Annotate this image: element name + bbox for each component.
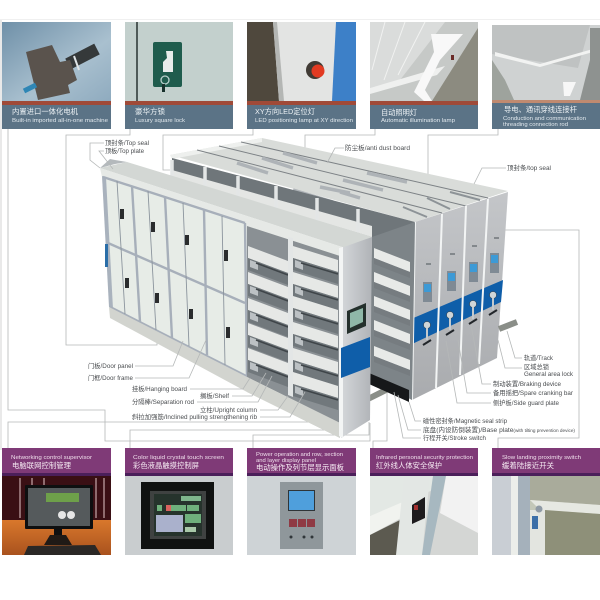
label: separation rod: 分隔棒/Separation rod: [132, 397, 194, 406]
control screens: [423, 238, 499, 302]
label: door frame: 门框/Door frame: [88, 373, 133, 382]
label: upright column: [200, 396, 288, 414]
panel: XY direction LED lamp: [247, 22, 356, 129]
label: track: 轨道/Track: [524, 353, 554, 362]
panel: slow landing proximity switch: Slow landing proximity switch: [502, 455, 581, 461]
panel: conduction threading rod: Conduction and communication: [503, 116, 586, 122]
label: top seal left: [90, 138, 150, 168]
label: general area lock: General area lock: [524, 371, 574, 378]
connector lines between photos and shelving: [8, 129, 579, 448]
label: door frame: [88, 340, 206, 382]
panel: networking control supervisor: 电脑联网控制管理: [12, 460, 71, 470]
label: hanging board: [132, 378, 250, 393]
label: anti dust board: [327, 143, 410, 163]
label: stroke switch: 行程开关/Stroke switch: [423, 433, 486, 442]
panel: automatic illumination lamp: [370, 22, 478, 129]
top rods: [237, 153, 480, 217]
panel: networking control supervisor: [2, 448, 111, 555]
label: base plate: [398, 395, 575, 434]
label: upright column: 立柱/Upright column: [200, 405, 257, 414]
label: shelf: 搁板/Shelf: [200, 391, 229, 400]
panel: conduction threading rod: 导电、通讯穿线连接杆: [504, 104, 577, 114]
front carriage top plate: [100, 162, 372, 248]
plinth: [109, 307, 340, 438]
panel: LCD touch screen: 彩色液晶触摸控制屏: [133, 460, 199, 470]
label: anti dust board: 防尘板/anti dust board: [345, 143, 410, 152]
label: door panel: [88, 341, 183, 370]
panel: slow landing proximity switch: 缓着陆接近开关: [502, 460, 554, 470]
label: door panel: 门板/Door panel: [88, 361, 134, 370]
label: spare cranking bar: 备用摇把/Spare cranking bar: [493, 388, 574, 397]
label: magnetic seal strip: 磁性密封条/Magnetic seal strip: [423, 416, 507, 425]
panel: infrared security protection: 红外线人体安全保护: [376, 460, 442, 470]
end panel: [341, 237, 372, 438]
label: inclined pulling strengthening rib: [132, 392, 305, 421]
door handles: [120, 209, 230, 338]
panel: automatic illumination lamp: Automatic illumination lamp: [381, 118, 455, 124]
panel: LCD touch screen: [125, 448, 233, 555]
label: hanging board: 挂板/Hanging board: [132, 384, 187, 393]
side faces of rear carriages: [412, 192, 508, 400]
panel: slow landing proximity switch: [492, 448, 600, 555]
label: general area lock: 区域总锁: [524, 362, 549, 371]
label: top plate: [99, 146, 144, 169]
rear carriages top surface: [170, 138, 508, 222]
label: side guard plate: 侧护板/Side guard plate: [493, 398, 559, 407]
label: general area lock: [498, 340, 574, 378]
open shelves: [247, 226, 340, 423]
label: inclined pulling strengthening rib: 斜拉加强筋/Inclined pulling strengthening rib: [132, 412, 257, 421]
label: shelf: [200, 373, 266, 400]
panel: luxury square lock: Luxury square lock: [135, 118, 185, 124]
track: [368, 322, 517, 399]
panel: XY direction LED lamp: LED positioning lamp at XY direction: [255, 118, 353, 124]
label: top plate: 顶板/Top plate: [105, 146, 144, 155]
panel: conduction threading rod: [492, 25, 600, 129]
panel: conduction threading rod: threading connection rod: [503, 122, 568, 128]
panel: infrared security protection: Infrared personal security protection: [376, 455, 473, 461]
panel: power operation panel: 电动操作及列节层显示面板: [256, 462, 344, 472]
label: base plate: 底盘(内设防倒装置)/Base plate (with tilting prevention device): [423, 425, 575, 434]
panel: infrared security protection: [370, 448, 478, 555]
panel: built-in motor: 内置进口一体化电机: [12, 106, 78, 116]
panel: built-in motor: Built-in imported all-in-one machine: [12, 118, 108, 124]
label: top seal right: 顶封条/top seal: [507, 163, 552, 172]
panel: luxury square lock: 豪华方锁: [135, 106, 165, 116]
label: top seal right: [474, 163, 552, 184]
panel: networking control supervisor: Networking control supervisor: [11, 455, 92, 461]
label: track: [507, 331, 554, 362]
panel: automatic illumination lamp: 自动照明灯: [381, 107, 417, 117]
blue side tab: [105, 244, 108, 267]
label: spare cranking bar: [458, 340, 574, 397]
label: top seal left: 顶封条/Top seal: [105, 138, 150, 147]
label: magnetic seal strip: [409, 402, 507, 425]
rear carriages open bays: [172, 158, 415, 240]
label: stroke switch: [394, 392, 486, 442]
panel: power operation panel: Power operation and row, section: [256, 452, 343, 458]
front carriage door face: [102, 176, 247, 377]
touch screen on end panel: [347, 303, 366, 334]
crank handles: [423, 292, 497, 345]
panel: built-in motor: [2, 22, 111, 129]
panel: power operation panel: [247, 448, 356, 555]
label: separation rod: [132, 376, 272, 406]
label: side guard plate: [446, 341, 559, 407]
panel: power operation panel: and layer display panel: [256, 458, 316, 464]
panel: luxury square lock: [125, 22, 233, 129]
panel: XY direction LED lamp: XY方向LED定位灯: [255, 106, 315, 116]
shelving unit: front carriage: [100, 159, 372, 438]
shelving unit: rear carriages: [170, 138, 517, 402]
label: braking device: 制动装置/Braking device: [493, 379, 561, 388]
label: braking device: [471, 325, 561, 388]
panel: LCD touch screen: Color liquid crystal touch screen: [133, 455, 224, 461]
middle open bay: [369, 222, 415, 400]
